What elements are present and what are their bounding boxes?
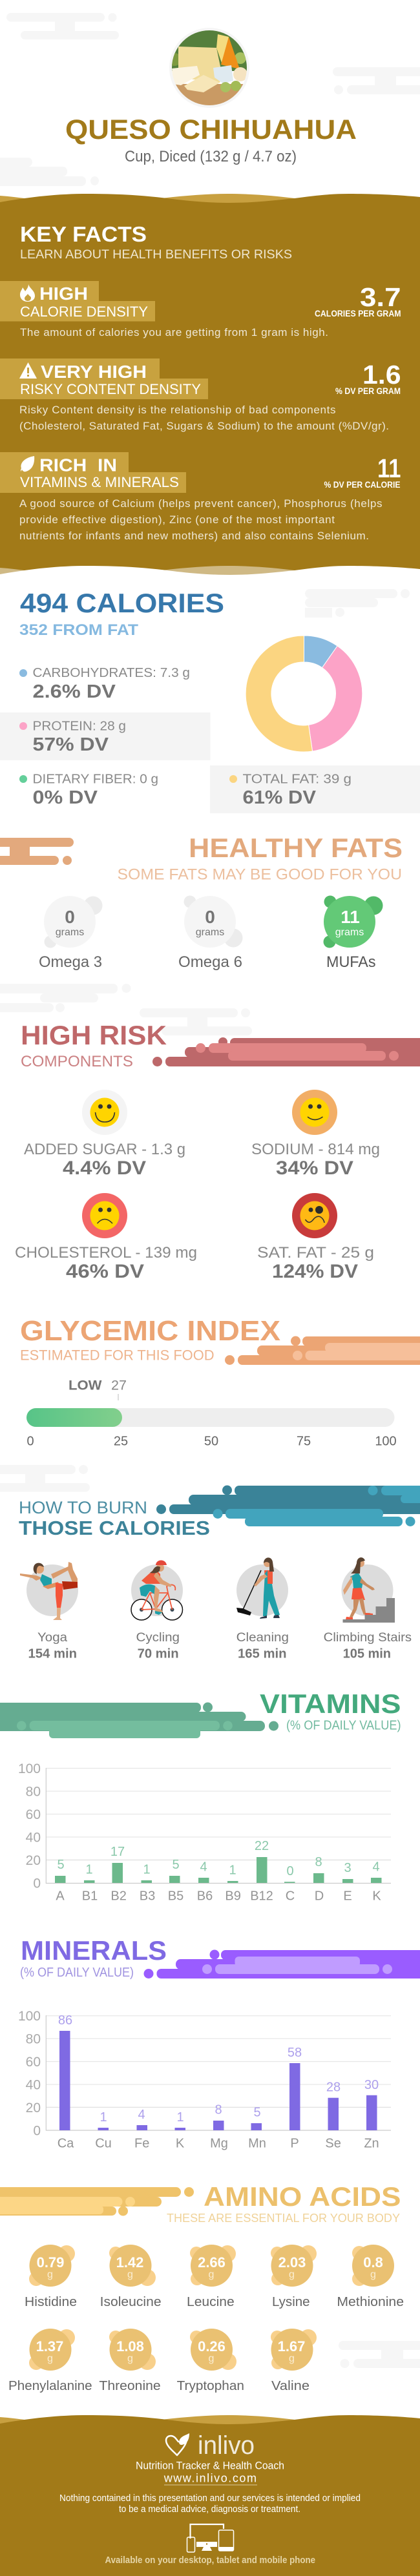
legend: dietary fiber xyxy=(19,773,158,808)
decorative bars xyxy=(143,1949,420,1979)
amino: isoleucine xyxy=(100,2245,162,2309)
risk: added sugar xyxy=(24,1090,185,1179)
icon: leaf xyxy=(21,456,34,472)
disclaimer: to be a medical advice, diagnosis or treatment. xyxy=(119,2504,300,2515)
legend: dietary fiber: 0% DV xyxy=(32,787,98,808)
gauge bar xyxy=(26,1408,394,1427)
bar chart: vitamins: 0 xyxy=(286,1864,294,1878)
panel: glycemic index xyxy=(20,1315,420,1449)
panel: footer xyxy=(0,2415,420,2576)
amino: lysine: Lysine xyxy=(272,2295,310,2309)
risk: sodium xyxy=(251,1090,380,1179)
risk: added sugar: ADDED SUGAR - 1.3 g xyxy=(24,1141,185,1158)
activity: cleaning xyxy=(236,1557,289,1661)
label: risky content density: RISKY CONTENT DENSITY xyxy=(20,381,201,397)
bar chart: vitamins: B2 xyxy=(110,1889,127,1904)
bar chart: vitamins: 40 xyxy=(26,1831,41,1845)
legend: protein xyxy=(19,720,126,755)
risk: sodium: SODIUM - 814 mg xyxy=(251,1141,380,1158)
fat: omega 6 xyxy=(178,895,243,971)
heading: amino acids: AMINO ACIDS xyxy=(204,2181,401,2212)
description: A good source of Calcium (helps prevent cancer), Phosphorus (helps xyxy=(19,497,383,510)
amino: valine: 1.67 xyxy=(278,2338,305,2354)
gauge scale: 0 xyxy=(26,1435,34,1449)
amino: tryptophan: g xyxy=(209,2353,214,2364)
activity: cycling: 70 min xyxy=(138,1647,179,1661)
bar chart: vitamins: 5 xyxy=(57,1858,65,1872)
amino: methionine xyxy=(337,2245,404,2309)
activity: yoga: 154 min xyxy=(28,1647,77,1661)
fat: mufas: 11 xyxy=(341,907,360,927)
serving size text: Cup, Diced (132 g / 4.7 oz) xyxy=(125,148,297,165)
description: (Cholesterol, Saturated Fat, Sugars & Sodium) to the amount (%DV/gr). xyxy=(19,420,389,432)
icon: happy face xyxy=(82,1090,127,1135)
amino: threonine: g xyxy=(127,2353,133,2364)
rating: rich in: RICH IN xyxy=(39,455,117,475)
amino: methionine: 0.8 xyxy=(363,2254,383,2270)
activity: cycling: Cycling xyxy=(136,1631,180,1645)
description xyxy=(19,404,389,432)
fat: omega 6: 0 xyxy=(205,907,215,927)
subheading: components: COMPONENTS xyxy=(21,1053,133,1070)
legend: carbohydrates xyxy=(19,666,190,702)
amino: tryptophan: Tryptophan xyxy=(177,2379,244,2393)
heading: vitamins: VITAMINS xyxy=(260,1688,401,1719)
food photo: cheese board xyxy=(168,26,252,110)
decorative cloud xyxy=(0,1465,90,1492)
highlight band: total fat xyxy=(210,765,420,813)
bar chart: minerals: Mn xyxy=(248,2136,266,2150)
logo wordmark: inlivo xyxy=(198,2431,255,2460)
risk: cholesterol: 46% DV xyxy=(66,1261,144,1282)
description xyxy=(19,497,383,542)
heading: key facts: KEY FACTS xyxy=(20,222,147,246)
description: The amount of calories you are getting from 1 gram is high. xyxy=(20,326,328,338)
label background xyxy=(0,452,186,493)
bar chart: minerals: Zn xyxy=(364,2136,379,2150)
bar chart: minerals: 40 xyxy=(26,2077,41,2093)
website underline xyxy=(164,2484,257,2486)
activity: climbing stairs xyxy=(324,1557,412,1661)
amino: isoleucine: Isoleucine xyxy=(100,2295,162,2309)
value: 1.6 xyxy=(362,360,401,390)
activity: cleaning: Cleaning xyxy=(236,1631,289,1645)
amino: lysine: g xyxy=(289,2269,295,2280)
decorative bars xyxy=(0,1703,278,1738)
subheading: from fat: 352 FROM FAT xyxy=(19,621,138,639)
gauge scale: 25 xyxy=(114,1435,128,1449)
highlight band: protein xyxy=(0,712,211,760)
risk: saturated fat: 124% DV xyxy=(272,1261,358,1282)
heading line 1: HOW TO BURN xyxy=(19,1498,147,1517)
amino: threonine: 1.08 xyxy=(116,2338,144,2354)
risk: sodium: 34% DV xyxy=(276,1158,353,1179)
amino: valine: g xyxy=(289,2353,295,2364)
activity: yoga xyxy=(20,1562,78,1661)
rating: high: HIGH xyxy=(39,284,88,304)
bar chart: vitamins: B6 xyxy=(197,1889,213,1904)
amino: lysine: 2.03 xyxy=(278,2254,306,2270)
legend: total fat: 61% DV xyxy=(243,787,317,808)
risk: cholesterol xyxy=(15,1193,197,1282)
activity: yoga: Yoga xyxy=(37,1631,67,1645)
amino: lysine xyxy=(271,2245,317,2309)
amino: isoleucine: g xyxy=(127,2269,133,2280)
activity: climbing stairs: Climbing Stairs xyxy=(324,1631,412,1645)
panel: vitamins xyxy=(0,1688,401,1904)
amino: leucine: g xyxy=(209,2269,214,2280)
bar chart: minerals: 1 xyxy=(100,2110,107,2124)
bar chart: minerals: 86 xyxy=(58,2013,72,2028)
value: 11 xyxy=(377,453,401,483)
bar chart: minerals: 4 xyxy=(138,2108,145,2122)
gauge scale: 50 xyxy=(204,1435,218,1449)
icon: flame xyxy=(20,284,35,302)
disclaimer: Nothing contained in this presentation and our services is intended or implied xyxy=(59,2493,361,2504)
bottom wave xyxy=(0,566,420,595)
subheading: (% OF DAILY VALUE) xyxy=(20,1966,134,1980)
amino: methionine: Methionine xyxy=(337,2295,404,2309)
amino: tryptophan xyxy=(177,2329,244,2393)
subheading: (% OF DAILY VALUE) xyxy=(286,1719,401,1733)
decorative cloud center xyxy=(140,1008,252,1035)
risk: saturated fat: SAT. FAT - 25 g xyxy=(257,1244,374,1262)
header wave xyxy=(0,194,420,578)
unit: CALORIES PER GRAM xyxy=(315,309,401,318)
legend: total fat xyxy=(229,773,352,808)
decorative bars xyxy=(0,2187,194,2216)
risk: saturated fat xyxy=(257,1193,374,1282)
bar chart: vitamins: 22 xyxy=(255,1839,269,1853)
heading: minerals: MINERALS xyxy=(21,1935,167,1966)
donut chart xyxy=(246,636,362,752)
legend: protein: PROTEIN: 28 g xyxy=(32,720,126,734)
bar chart: vitamins: 4 xyxy=(372,1860,380,1875)
bar chart: minerals: Mg xyxy=(210,2136,228,2150)
disclaimer xyxy=(59,2493,361,2515)
panel: key facts xyxy=(0,194,420,595)
unit: % DV PER GRAM xyxy=(335,386,401,396)
icon: devices xyxy=(187,2524,234,2552)
heading: calories: 494 CALORIES xyxy=(20,588,224,618)
bar chart: minerals: Se xyxy=(325,2136,341,2150)
bar chart: minerals: 5 xyxy=(253,2106,261,2120)
bar chart: vitamins: D xyxy=(315,1889,324,1904)
activity: cleaning: 165 min xyxy=(238,1647,287,1661)
decorative bars xyxy=(225,1336,420,1365)
bar chart: minerals: 1 xyxy=(176,2110,184,2124)
bar chart: vitamins xyxy=(18,1761,391,1904)
bar chart: minerals: Cu xyxy=(95,2136,112,2150)
amino: threonine xyxy=(99,2329,161,2393)
bar chart: vitamins: 20 xyxy=(26,1853,41,1868)
amino: isoleucine: 1.42 xyxy=(116,2254,143,2270)
fat: omega 6: grams xyxy=(196,927,224,938)
panel: healthy fats xyxy=(0,833,403,971)
activity: cycling xyxy=(131,1560,183,1661)
bar chart: vitamins: 100 xyxy=(18,1761,41,1776)
bar chart: minerals xyxy=(18,2009,391,2150)
bar chart: vitamins: 0 xyxy=(33,1876,41,1891)
amino: leucine: 2.66 xyxy=(198,2254,226,2270)
icon: warning xyxy=(19,362,37,379)
bar chart: minerals: Fe xyxy=(134,2136,149,2150)
fat: mufas: grams xyxy=(335,927,364,938)
icon: smiling face xyxy=(292,1090,337,1135)
bar chart: minerals: 20 xyxy=(26,2101,41,2115)
rating: very high: VERY HIGH xyxy=(41,362,147,382)
fat: omega 6: Omega 6 xyxy=(178,953,242,971)
amino: histidine: 0.79 xyxy=(37,2254,64,2270)
label background xyxy=(0,281,155,322)
fact: risky content density xyxy=(0,358,401,432)
amino: tryptophan: 0.26 xyxy=(198,2338,226,2354)
subheading: THESE ARE ESSENTIAL FOR YOUR BODY xyxy=(167,2211,400,2225)
icon: cleaning figure xyxy=(236,1557,280,1619)
amino: histidine: Histidine xyxy=(25,2295,77,2309)
website: www.inlivo.com xyxy=(163,2472,257,2485)
amino: phenylalanine: Phenylalanine xyxy=(8,2379,92,2393)
legend: total fat: TOTAL FAT: 39 g xyxy=(243,773,352,787)
legend: protein: 57% DV xyxy=(32,734,109,755)
amino: histidine: g xyxy=(47,2269,53,2280)
bar chart: vitamins: 3 xyxy=(344,1861,352,1875)
decorative background cloud top left xyxy=(6,13,119,39)
bar chart: vitamins: 5 xyxy=(172,1858,180,1872)
bar chart: vitamins: B9 xyxy=(225,1889,241,1904)
tagline: Nutrition Tracker & Health Coach xyxy=(136,2460,284,2472)
risk: added sugar: 4.4% DV xyxy=(63,1158,146,1179)
bar chart: vitamins: 8 xyxy=(315,1855,322,1869)
bar chart: vitamins: B1 xyxy=(82,1889,98,1904)
bar chart: minerals: 28 xyxy=(326,2081,341,2095)
bar chart: vitamins: C xyxy=(286,1889,295,1904)
decorative background cloud left xyxy=(0,158,99,186)
heading: glycemic index: GLYCEMIC INDEX xyxy=(20,1315,280,1347)
icon: cyclist figure xyxy=(131,1560,182,1620)
icon: sad face xyxy=(82,1193,127,1238)
gauge scale: 100 xyxy=(375,1435,397,1449)
marker tick xyxy=(118,1394,119,1400)
amino: leucine: Leucine xyxy=(187,2295,235,2309)
panel: minerals xyxy=(18,1935,420,2150)
description: nutrients for infants and new mothers) and also contains Selenium. xyxy=(19,530,369,542)
fact: calorie density xyxy=(0,281,401,338)
amino: leucine xyxy=(187,2245,236,2309)
subheading: LEARN ABOUT HEALTH BENEFITS OR RISKS xyxy=(20,247,292,262)
panel: high risk components xyxy=(15,1020,420,1282)
bar chart: vitamins: 1 xyxy=(85,1863,93,1877)
bar chart: minerals: 58 xyxy=(288,2046,302,2060)
gauge scale xyxy=(26,1435,397,1449)
bar chart: vitamins: 4 xyxy=(200,1860,207,1875)
decorative cloud left xyxy=(0,984,131,1012)
label: vitamins and minerals: VITAMINS & MINERALS xyxy=(20,474,179,490)
fact: rich in vitamins and minerals xyxy=(0,452,401,542)
legend: dietary fiber: DIETARY FIBER: 0 g xyxy=(32,773,158,787)
bar chart: vitamins: A xyxy=(56,1889,65,1904)
bar chart: minerals: 80 xyxy=(26,2032,41,2046)
gauge scale: 75 xyxy=(297,1435,311,1449)
bar chart: minerals: K xyxy=(176,2136,185,2150)
decorative bars xyxy=(152,1037,420,1066)
bar chart: minerals: 30 xyxy=(364,2078,379,2092)
amino: phenylalanine: g xyxy=(47,2353,53,2364)
bar chart: vitamins: B3 xyxy=(140,1889,155,1904)
bar chart: minerals: 8 xyxy=(215,2103,222,2117)
bar chart: minerals: 100 xyxy=(18,2009,41,2024)
bar chart: minerals: P xyxy=(290,2136,299,2150)
amino: phenylalanine xyxy=(8,2329,92,2393)
fat: mufas xyxy=(323,895,383,971)
amino: valine: Valine xyxy=(271,2379,310,2393)
fat: omega 3: grams xyxy=(56,927,84,938)
subheading: ESTIMATED FOR THIS FOOD xyxy=(20,1347,215,1364)
icon: yoga figure xyxy=(20,1562,78,1620)
heading: healthy fats: HEALTHY FATS xyxy=(189,833,403,863)
icon: sick face xyxy=(292,1193,337,1238)
heading: high risk: HIGH RISK xyxy=(21,1020,167,1050)
subheading: SOME FATS MAY BE GOOD FOR YOU xyxy=(118,866,402,884)
amino: phenylalanine: 1.37 xyxy=(36,2338,63,2354)
bar chart: minerals: 0 xyxy=(33,2124,41,2138)
fat: omega 3: Omega 3 xyxy=(39,953,102,971)
amino: threonine: Threonine xyxy=(99,2379,161,2393)
label: calorie density: CALORIE DENSITY xyxy=(20,304,148,320)
heading line 2: THOSE CALORIES xyxy=(19,1517,210,1539)
logo icon: heart with leaf xyxy=(166,2433,189,2455)
bar chart: vitamins: E xyxy=(343,1889,352,1904)
unit: % DV PER CALORIE xyxy=(324,480,401,490)
decorative bars xyxy=(156,1486,420,1526)
title: QUESO CHIHUAHUA xyxy=(65,114,357,145)
decorative cloud xyxy=(305,589,410,618)
amino: histidine xyxy=(25,2245,77,2309)
value: 3.7 xyxy=(360,282,401,312)
decorative cloud right xyxy=(339,2341,420,2368)
bar chart: vitamins: B12 xyxy=(250,1889,273,1904)
bar chart: vitamins: 80 xyxy=(26,1784,41,1800)
decorative background cloud top right xyxy=(333,67,420,94)
activity: climbing stairs: 105 min xyxy=(343,1647,391,1661)
amino: methionine: g xyxy=(370,2269,376,2280)
bar chart: vitamins: K xyxy=(372,1889,381,1904)
bar chart: vitamins: 1 xyxy=(229,1864,236,1878)
label background xyxy=(0,358,208,399)
amino: valine xyxy=(271,2329,317,2393)
legend: carbohydrates: CARBOHYDRATES: 7.3 g xyxy=(32,666,190,680)
footer wave xyxy=(0,2415,420,2576)
fat: mufas: MUFAs xyxy=(326,953,376,971)
panel: calories xyxy=(0,588,420,813)
bar chart: vitamins: B5 xyxy=(168,1889,184,1904)
fat: omega 3: 0 xyxy=(65,907,75,927)
bar chart: vitamins: 17 xyxy=(110,1845,125,1859)
availability note: Available on your desktop, tablet and mobile phone xyxy=(105,2555,315,2566)
description: Risky Content density is the relationship of bad components xyxy=(19,404,336,416)
panel: how to burn those calories xyxy=(19,1486,420,1661)
bar chart: vitamins: 1 xyxy=(143,1863,151,1877)
legend: carbohydrates: 2.6% DV xyxy=(32,681,116,702)
risk: cholesterol: CHOLESTEROL - 139 mg xyxy=(15,1244,197,1262)
fat: omega 3 xyxy=(39,896,102,971)
value: 27: 27 xyxy=(111,1378,127,1393)
decorative bar xyxy=(0,838,74,865)
rating: low: LOW xyxy=(68,1378,102,1393)
bar chart: minerals: Ca xyxy=(58,2136,74,2150)
description: provide effective digestion), Zinc (one of the most important xyxy=(19,514,335,526)
panel: amino acids xyxy=(0,2181,404,2393)
icon: climbing stairs figure xyxy=(342,1557,395,1623)
bar chart: minerals: 60 xyxy=(26,2055,41,2070)
bar chart: vitamins: 60 xyxy=(26,1807,41,1822)
